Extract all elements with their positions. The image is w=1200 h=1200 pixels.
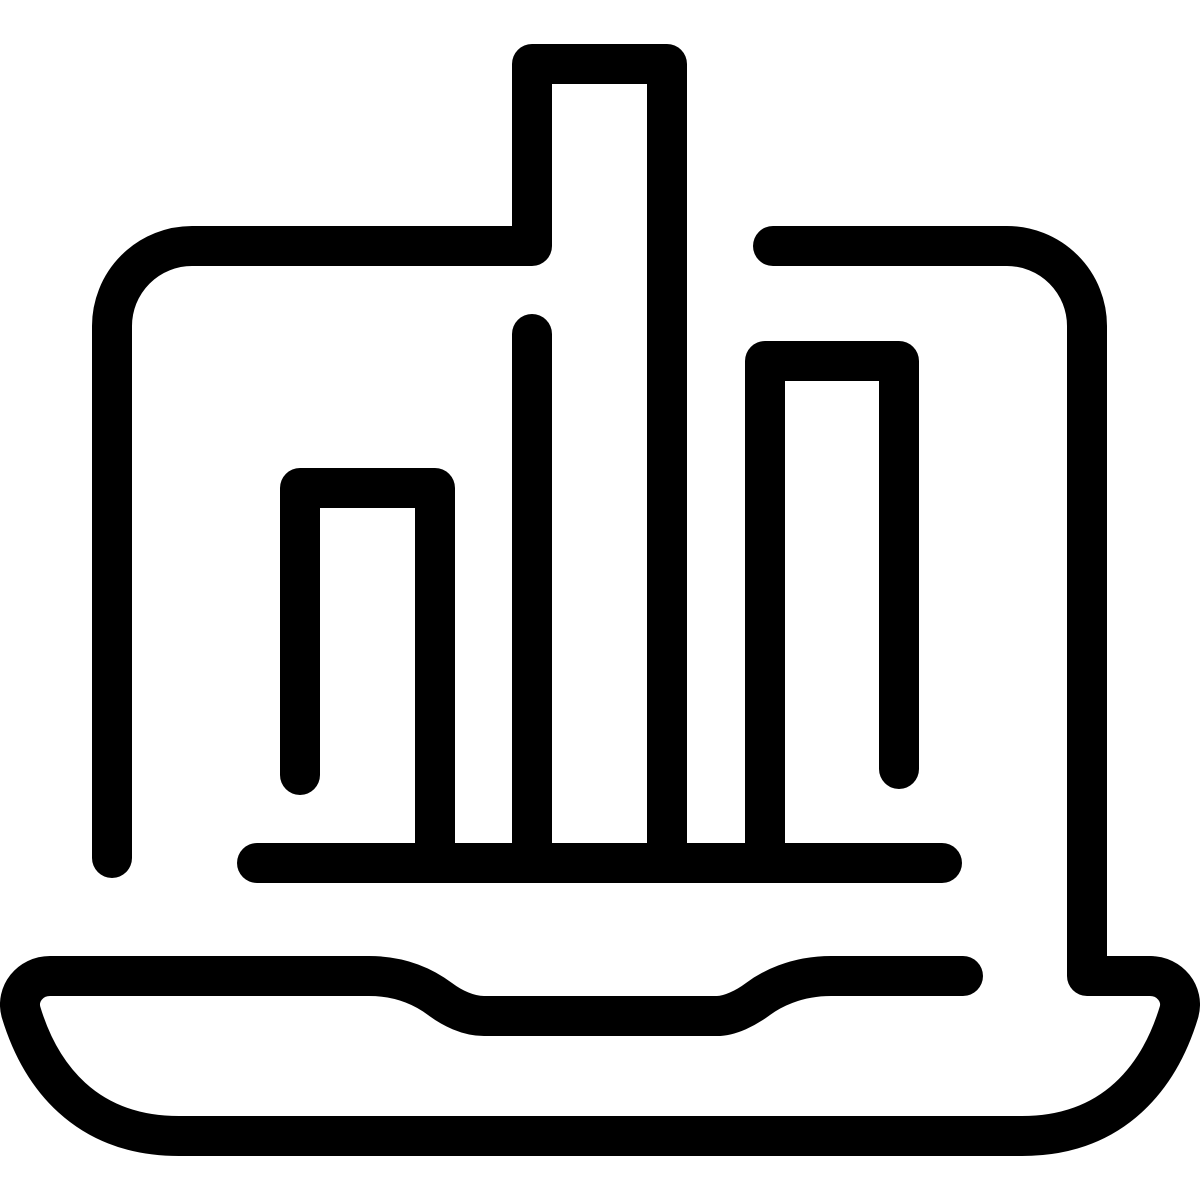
chart baseline: [257, 843, 942, 883]
laptop screen right edge: [773, 246, 1150, 976]
middle bar: [512, 334, 552, 863]
left bar: [300, 488, 435, 863]
laptop base: [20, 976, 1180, 1136]
laptop screen left edge and tall bar: [112, 64, 667, 863]
right bar: [765, 361, 899, 863]
